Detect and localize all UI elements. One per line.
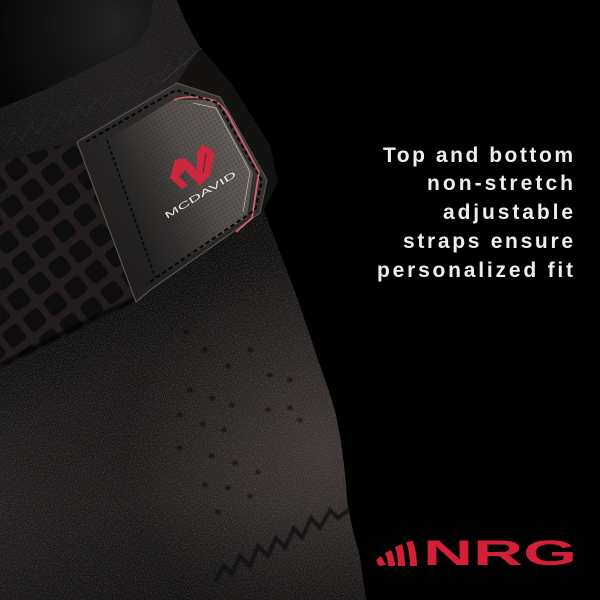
feature text	[377, 144, 573, 282]
NRG wordmark: NRG	[423, 534, 577, 573]
top cuff band	[0, 0, 200, 162]
signal bars icon	[376, 541, 417, 566]
dimple rows on brace body	[177, 330, 303, 514]
zigzag seam on brace body	[215, 509, 350, 582]
skin area above cuff	[0, 0, 153, 108]
mesh strap	[0, 140, 138, 368]
NRG logo	[376, 534, 577, 573]
brace main body	[0, 205, 366, 600]
McDavid M logo	[170, 144, 215, 189]
patch dot texture	[135, 100, 253, 265]
feature text: adjustable	[443, 201, 573, 224]
strap velcro backing	[0, 47, 278, 368]
cuff zigzag stitching	[6, 50, 186, 146]
feature text: Top and bottom	[383, 144, 573, 167]
patch inner gloss panel	[107, 100, 253, 277]
McDavid wordmark: MCDAVID	[163, 169, 239, 221]
patch red trim	[174, 97, 259, 232]
McDavid patch	[77, 83, 267, 302]
feature text: personalized fit	[377, 259, 573, 282]
patch outer stitching	[86, 90, 262, 284]
feature text: non-stretch	[427, 172, 573, 195]
cuff seam	[162, 48, 201, 82]
patch inner stitching	[107, 140, 155, 277]
patch silver trim	[193, 103, 250, 212]
patch outer leather	[77, 83, 267, 302]
feature text: straps ensure	[403, 230, 573, 253]
